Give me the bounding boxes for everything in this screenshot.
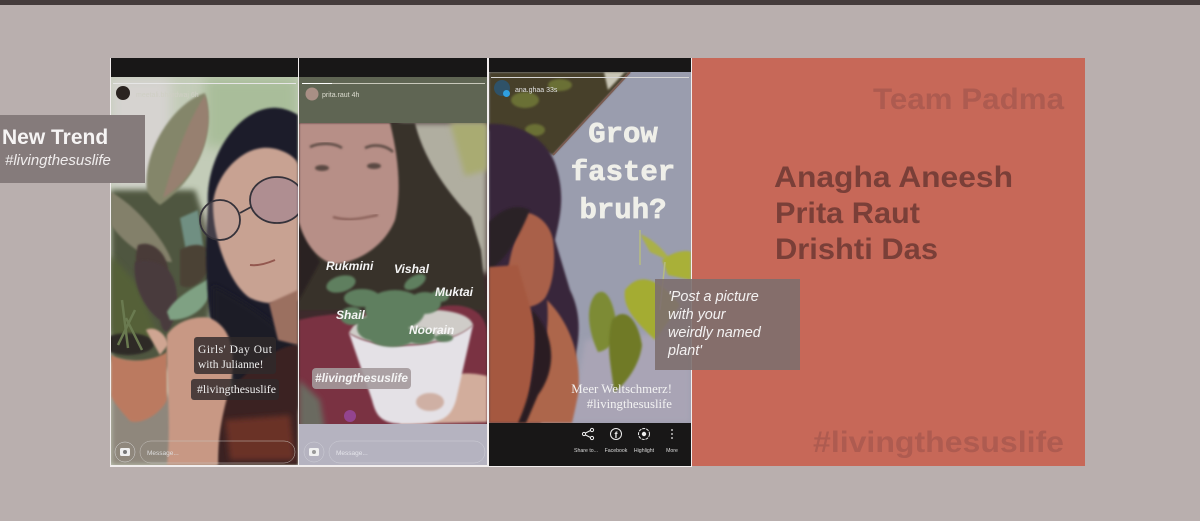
plant [324, 271, 453, 347]
hair [489, 124, 579, 423]
team members: Anagha Aneesh [774, 161, 1013, 194]
tag: Girls' Day Out [194, 337, 276, 374]
icon: camera [115, 442, 135, 462]
olive header band [299, 77, 487, 123]
face [299, 123, 399, 264]
action labels: Share to... [574, 448, 598, 454]
story caption: #livingthesuslife [587, 397, 672, 411]
message field [329, 441, 485, 463]
plant leaves [640, 234, 668, 259]
headline: grow faster bruh: faster [571, 156, 675, 189]
callout: post a picture [655, 279, 800, 370]
story progress line [113, 83, 296, 84]
panel: story 1 selfie with plants [102, 58, 304, 465]
callout: new trend [0, 115, 145, 183]
shirt [299, 305, 487, 430]
callout: new trend: New Trend [2, 126, 108, 149]
headline: grow faster bruh: bruh? [579, 194, 667, 227]
callout: post a picture: weirdly named [668, 325, 762, 341]
callout: post a picture: plant' [667, 343, 703, 359]
panel: team credits [692, 58, 1085, 466]
plant name labels: Noorain [409, 323, 454, 337]
icon: facebook [610, 428, 622, 440]
callout: new trend: #livingthesuslife [5, 152, 111, 169]
message field: Message... [336, 450, 368, 457]
plant name labels: Muktai [435, 285, 474, 299]
action labels: Facebook [605, 448, 628, 454]
message field [140, 441, 295, 463]
username: meetali.bhardwaj 6h [136, 92, 199, 99]
action labels [574, 448, 678, 454]
floor [111, 395, 221, 465]
avatar [306, 88, 318, 100]
bottom translucent bar [299, 424, 487, 465]
panel backing frame [110, 58, 692, 467]
username: prita.raut 4h [322, 92, 359, 99]
glasses [200, 177, 304, 240]
top bar [0, 0, 1200, 5]
tag: Girls' Day Out: Girls' Day Out [198, 344, 273, 356]
callout: post a picture: with your [668, 307, 727, 323]
plant name labels: Rukmini [326, 259, 374, 273]
terracotta pot [111, 352, 167, 422]
callout: post a picture: 'Post a picture [668, 289, 759, 305]
icon: more [671, 429, 673, 439]
tag: hashtag: #livingthesuslife [197, 384, 276, 396]
face [213, 148, 298, 304]
panel: story 2 plant held up [299, 58, 487, 465]
plant name labels: Vishal [394, 262, 430, 276]
hand [167, 317, 233, 465]
tag: Girls' Day Out: with Julianne! [198, 359, 263, 371]
story caption: Meer Weltschmerz! [571, 382, 672, 396]
plant name labels [326, 259, 474, 337]
story progress line [491, 77, 689, 78]
action labels: Highlight [634, 448, 655, 454]
moss triangle [489, 72, 630, 155]
hashtag: #livingthesuslife [813, 426, 1064, 459]
icon: camera [304, 442, 324, 462]
headline: grow faster bruh [571, 118, 675, 227]
face [505, 212, 554, 307]
headline: grow faster bruh: Grow [588, 118, 658, 151]
hand and arm [489, 265, 536, 423]
icon: facebook: f [614, 430, 618, 440]
team members: Prita Raut [775, 197, 920, 230]
icon: share [582, 428, 594, 440]
heading: team name: Team Padma [873, 83, 1064, 116]
shirt [217, 345, 298, 465]
hashtag tag [312, 368, 411, 389]
white pot [349, 325, 473, 424]
avatar [494, 80, 510, 97]
plant name labels: Shail [336, 308, 365, 322]
username: ana.ghaa 33s [515, 87, 558, 94]
tag: hashtag [191, 379, 279, 400]
action bar [489, 423, 691, 466]
action labels: More [666, 448, 678, 454]
hashtag tag: #livingthesuslife [315, 371, 408, 385]
icon: highlight [638, 428, 650, 440]
team members: Drishti Das [775, 233, 938, 266]
hair [299, 123, 487, 310]
message field: Message... [147, 450, 179, 457]
hair [206, 108, 298, 345]
hand [400, 373, 487, 424]
story caption [571, 382, 672, 411]
panel: story 3 grow faster [489, 58, 691, 466]
lower plant background [111, 190, 218, 370]
wall lower right [570, 330, 691, 423]
avatar [116, 86, 130, 100]
team members [774, 161, 1013, 266]
icon: heart sticker [344, 410, 356, 422]
story progress line [302, 83, 485, 84]
